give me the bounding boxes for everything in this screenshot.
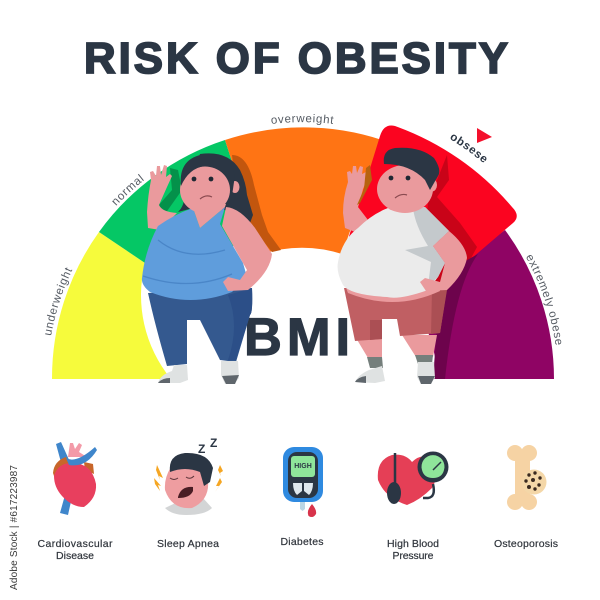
woman raised arm	[147, 165, 177, 230]
snore letter large: Z	[210, 436, 217, 450]
woman tank top	[142, 207, 247, 300]
gauge shadows	[420, 155, 477, 290]
BMI gauge	[52, 125, 554, 379]
title: RISK OF OBESITY	[84, 34, 511, 83]
label: overweight: overweight	[271, 114, 334, 125]
gauge segment: normal	[99, 140, 262, 263]
gauge segment: overweight	[225, 127, 382, 254]
caption: cardiovascular disease: Cardiovascular	[38, 538, 113, 550]
stock credit: Adobe Stock | #617223987	[9, 465, 20, 590]
woman jeans	[148, 288, 252, 366]
caption: diabetes: Diabetes	[280, 536, 324, 548]
label: obsese: obsese	[450, 134, 486, 162]
man head	[377, 165, 433, 213]
icon: heart	[53, 442, 97, 515]
arm shadow on orange	[357, 165, 372, 205]
man face	[389, 176, 410, 180]
woman shoes	[158, 365, 188, 383]
caption: osteoporosis: Osteoporosis	[494, 538, 558, 550]
man shorts	[344, 288, 447, 341]
woman figure	[142, 153, 281, 384]
woman hair back	[178, 153, 253, 223]
man hair	[384, 148, 439, 190]
gauge segment: extremely obese	[410, 230, 554, 379]
icon: heart with blood pressure gauge	[378, 452, 448, 505]
man T-shirt	[338, 207, 449, 298]
tank fold lines	[143, 240, 232, 284]
man shoes	[355, 366, 385, 383]
meter reading: HIGH	[294, 463, 312, 470]
woman ear	[230, 181, 240, 193]
woman right arm	[222, 207, 272, 291]
man right arm	[420, 231, 467, 291]
man socks	[367, 355, 433, 368]
caption: cardiovascular disease: Disease	[56, 550, 94, 562]
woman face	[192, 177, 213, 181]
icon: bone	[507, 445, 546, 510]
label: extremely obese: extremely obese	[526, 255, 562, 345]
man neck	[388, 205, 418, 212]
man raised arm	[343, 166, 368, 232]
snore letters: Z	[198, 442, 205, 456]
man legs	[356, 335, 437, 358]
icon: sleeping man	[154, 436, 223, 515]
icon: glucose meter	[283, 447, 323, 517]
woman hair front	[181, 154, 235, 196]
marker triangle	[477, 128, 492, 143]
woman shadow	[232, 155, 281, 252]
gauge segment: underweight	[52, 232, 171, 379]
caption: sleep apnea: Sleep Apnea	[157, 538, 219, 550]
gauge segment: obese highlighted	[346, 125, 517, 280]
label: normal: normal	[112, 174, 144, 206]
label: underweight: underweight	[45, 267, 72, 336]
caption: high blood pressure: Pressure	[392, 550, 434, 562]
woman head	[180, 166, 230, 214]
woman neck	[193, 204, 226, 228]
BMI text: BMI	[244, 308, 355, 367]
man ear	[427, 178, 437, 192]
man figure	[338, 148, 467, 384]
man shirt shading	[405, 207, 449, 286]
caption: high blood pressure: High Blood	[387, 538, 439, 550]
